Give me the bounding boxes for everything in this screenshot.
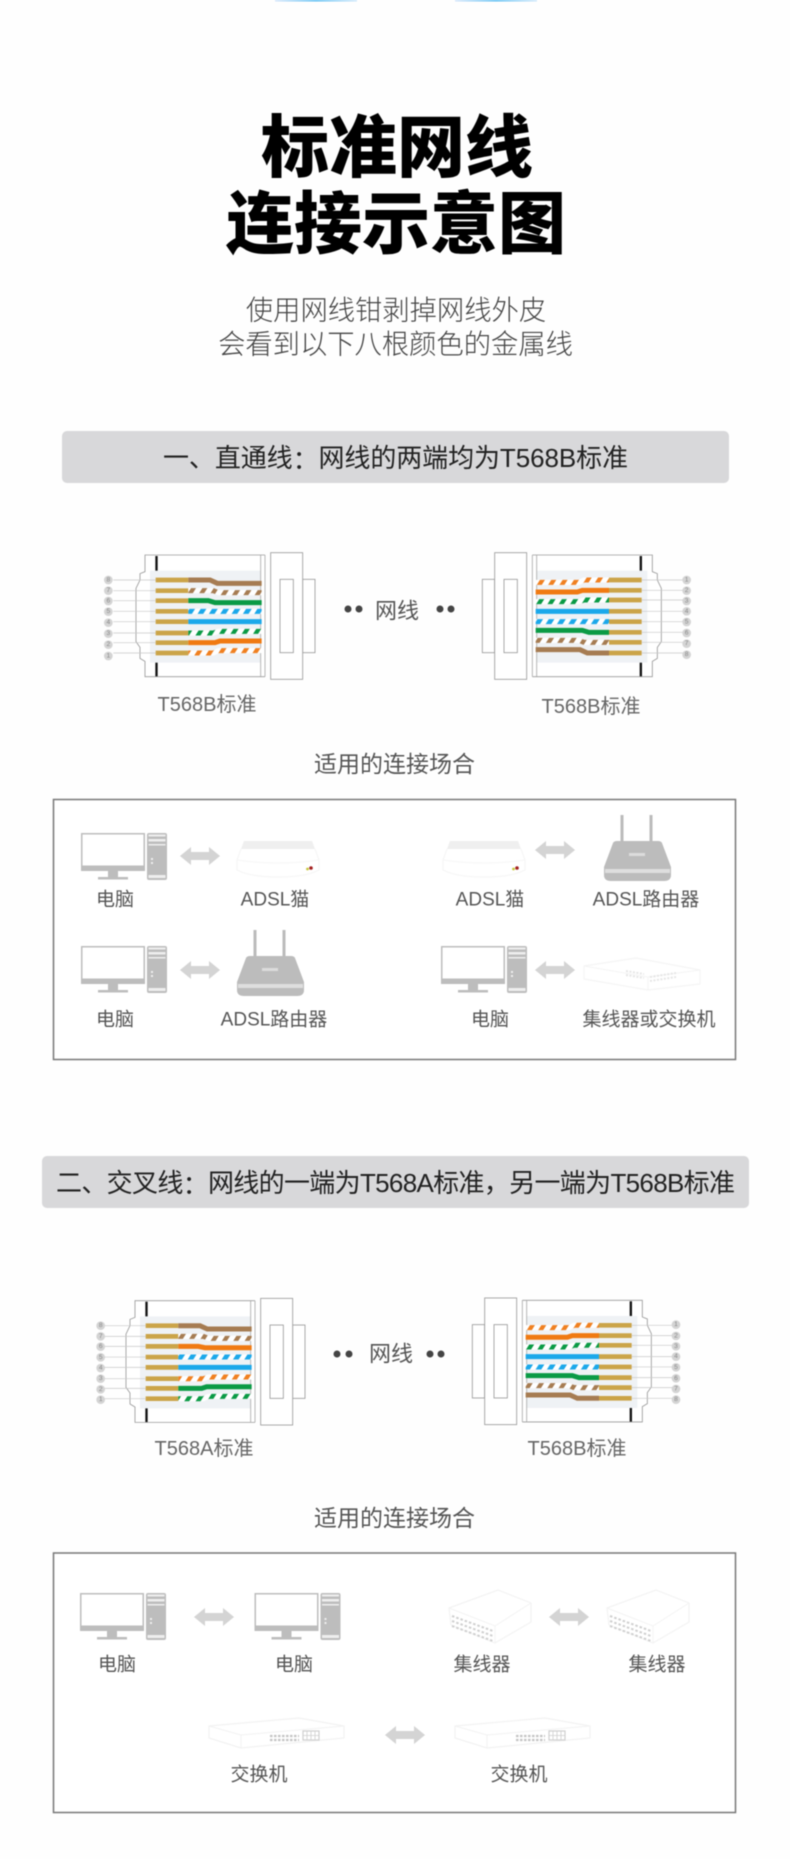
icon: computer: [80, 1593, 166, 1640]
icon: arrow: [535, 961, 575, 979]
connector: left T568A: 7: [99, 1333, 103, 1340]
section heading: crossover cable: [42, 1156, 749, 1208]
label: computer: 电脑: [471, 1008, 509, 1030]
icon: arrow: [180, 961, 220, 979]
subheading: applicable scenarios: 适用的连接场合: [314, 1505, 475, 1531]
connector: right T568B: 5: [674, 1364, 678, 1371]
connector: right T568B: 6: [685, 629, 689, 636]
section heading: crossover cable: 二、交叉线：网线的一端为T568A标准，另一端为T568B标准: [56, 1164, 735, 1202]
intro text: 会看到以下八根颜色的金属线: [218, 328, 573, 360]
icon: modem: [237, 841, 319, 877]
intro text: 使用网线钳剥掉网线外皮: [246, 294, 546, 326]
icon: router: [237, 930, 304, 996]
title: 连接示意图: [226, 187, 566, 263]
label: modem: ADSL猫: [456, 888, 524, 910]
panel: straight-through scenarios: [54, 800, 736, 1060]
connector: left T568B: 6: [106, 597, 110, 604]
title: 标准网线: [261, 110, 533, 186]
label: router: ADSL路由器: [221, 1008, 327, 1030]
icon: switch: [455, 1718, 590, 1748]
connector: left T568B: 5: [106, 608, 110, 615]
connector: left T568B: 7: [106, 587, 110, 594]
connector: left T568B: [104, 553, 315, 679]
icon: router: [604, 815, 671, 881]
label: computer: 电脑: [96, 1008, 134, 1030]
connector: right T568B: 1: [685, 576, 689, 583]
connector: right T568B: 8: [685, 651, 689, 658]
icon: hub: [607, 1590, 689, 1643]
icon: arrow: [180, 847, 220, 865]
label: switch: 交换机: [490, 1764, 548, 1786]
label: computer: 电脑: [98, 1654, 136, 1676]
icon: arrow: [535, 841, 575, 859]
connector: right T568B: 4: [685, 608, 689, 615]
label: hub: 集线器: [453, 1654, 511, 1676]
connector: left T568A: 8: [99, 1322, 103, 1329]
connector: left T568A: 6: [99, 1343, 103, 1350]
icon: switch: [584, 958, 700, 990]
section heading: straight-through cable: [62, 431, 729, 483]
subheading: applicable scenarios: 适用的连接场合: [314, 751, 475, 777]
connector: right T568B: 7: [685, 640, 689, 647]
label: computer: 电脑: [96, 888, 134, 910]
icon: switch: [209, 1718, 344, 1748]
connector: left T568B: 1: [106, 652, 110, 659]
icon: modem: [443, 841, 525, 877]
connector: left T568A: 2: [99, 1386, 103, 1393]
connector: left T568B: 8: [106, 576, 110, 583]
connector: right T568B: [472, 1298, 680, 1425]
link dots and cable label: 网线: [369, 1342, 413, 1366]
connector: left T568A: [96, 1298, 305, 1425]
connector: right T568B: 2: [685, 587, 689, 594]
caption: right T568B: T568B标准: [542, 695, 640, 718]
icon: computer: [441, 946, 527, 993]
connector: right T568B: 3: [674, 1343, 678, 1350]
connector: right T568B: 6: [674, 1375, 678, 1382]
link dots and cable label: [334, 1342, 444, 1366]
connector: right T568B: [482, 553, 691, 679]
icon: computer: [81, 946, 167, 993]
connector: left T568A: 4: [99, 1365, 103, 1372]
connector: left T568B: 2: [106, 641, 110, 648]
icon: computer: [254, 1593, 340, 1640]
caption: right T568B: T568B标准: [528, 1437, 626, 1460]
link dots and cable label: 网线: [375, 598, 419, 624]
label: switch: 交换机: [230, 1764, 288, 1786]
connector: right T568B: 5: [685, 618, 689, 625]
connector: right T568B: 3: [685, 597, 689, 604]
caption: left T568B: T568B标准: [158, 693, 256, 716]
connector: right T568B: 8: [674, 1396, 678, 1403]
connector: left T568A: 5: [99, 1354, 103, 1361]
section heading: straight-through cable: 一、直通线：网线的两端均为T568B标准: [163, 440, 628, 476]
connector: right T568B: 4: [674, 1353, 678, 1360]
connector: right T568B: 2: [674, 1332, 678, 1339]
icon: hub: [449, 1590, 531, 1643]
title: [226, 110, 566, 263]
icon: arrow: [194, 1608, 234, 1626]
connector: right T568B: 1: [674, 1321, 678, 1328]
top edge glow: left: [275, 0, 357, 2]
connector: left T568A: 1: [99, 1396, 103, 1403]
connector: left T568B: 3: [106, 630, 110, 637]
label: computer: 电脑: [275, 1654, 313, 1676]
top edge glow: right: [455, 0, 537, 2]
caption: T568A: T568A标准: [155, 1437, 253, 1460]
label: hub: 集线器: [628, 1654, 686, 1676]
label: modem: ADSL猫: [241, 888, 309, 910]
panel: crossover scenarios: [54, 1553, 736, 1812]
label: hub or switch: 集线器或交换机: [582, 1008, 716, 1030]
icon: arrow: [549, 1608, 589, 1626]
connector: left T568A: 3: [99, 1375, 103, 1382]
icon: computer: [81, 833, 167, 880]
icon: arrow: [385, 1726, 425, 1744]
label: router: ADSL路由器: [593, 888, 699, 910]
connector: right T568B: 7: [674, 1385, 678, 1392]
intro text: [218, 294, 573, 360]
connector: left T568B: 4: [106, 619, 110, 626]
link dots and cable label: [344, 598, 454, 624]
